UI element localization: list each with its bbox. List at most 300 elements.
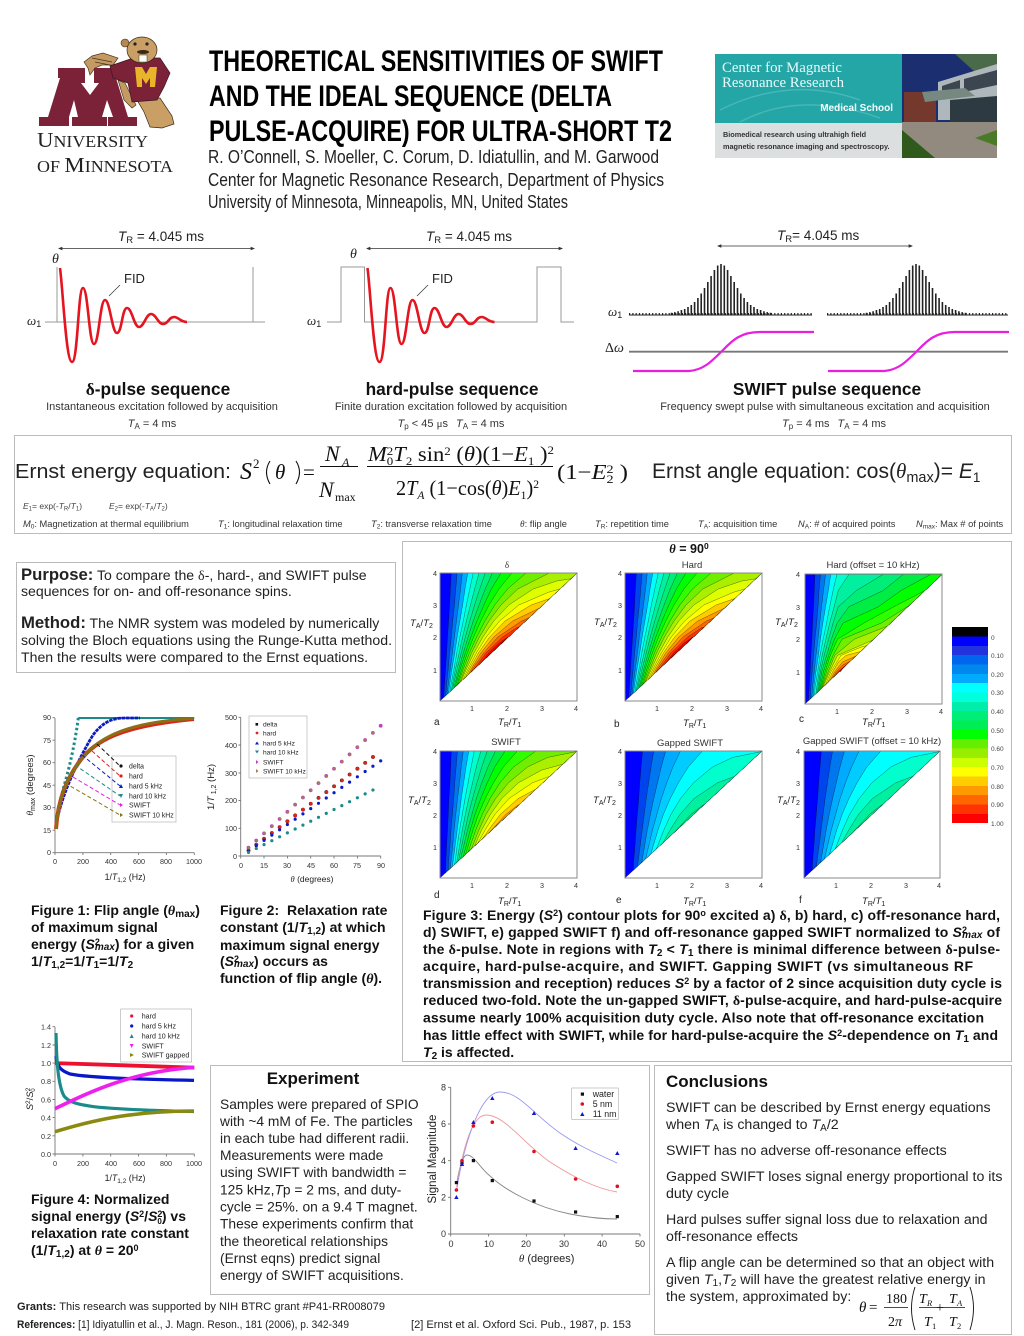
title: AND THE IDEAL SEQUENCE (DELTA <box>209 80 612 113</box>
TR label: R <box>126 235 133 246</box>
caption: figure 1: T <box>85 953 95 969</box>
purpose text <box>21 565 367 599</box>
caption: figure 1: 2 <box>128 960 134 971</box>
chart: figure 4 normalized signal energy: / <box>25 1097 36 1100</box>
tick labels: 0 <box>53 1159 57 1168</box>
energy equation formula: ) <box>534 442 548 466</box>
legend: hard 10 kHz <box>142 1032 180 1040</box>
tick labels: 20 <box>521 1239 531 1249</box>
grants and references: [2] Ernst et al. Oxford Sci. Pub., 1987, p. 153 <box>411 1319 631 1331</box>
caption: figure 1: T <box>119 953 129 969</box>
tick labels: 600 <box>133 857 145 866</box>
symbol definitions: R <box>601 524 606 530</box>
plot a: delta: δ <box>505 560 509 570</box>
chart: figure 1 flip angle <box>25 713 202 884</box>
heading: hard-pulse: hard-pulse sequence <box>366 379 539 399</box>
caption: figure 2: 2 <box>234 954 239 964</box>
plot e: gapped SWIFT: 4 <box>759 881 763 890</box>
chart: figure 4 normalized signal energy <box>25 1009 202 1185</box>
plot b: hard: 3 <box>618 601 622 610</box>
plot b: hard: 4 <box>759 704 763 713</box>
legend: hard 5 kHz <box>129 784 163 790</box>
symbol definitions: : Magnetization at thermal equilibrium <box>34 519 189 529</box>
authors and affiliation: University of Minnesota, Minneapolis, MN, United States <box>208 191 568 212</box>
tick labels: 45 <box>307 861 315 870</box>
method text: Then the results were compared to the Ernst equations. <box>21 649 368 665</box>
purpose text: sequences for on- and off-resonance spins. <box>21 583 292 599</box>
color scale legend: 0.60 <box>991 746 1004 753</box>
plot e: gapped SWIFT: 3 <box>618 779 622 788</box>
heading: Conclusions <box>666 1072 768 1091</box>
sub-captions: A <box>463 422 469 431</box>
tick labels: 6 <box>441 1119 446 1129</box>
symbol definitions: T <box>371 519 378 529</box>
symbol definitions: T <box>595 519 602 529</box>
caption: figure 1: ) <box>195 902 200 918</box>
plot e: gapped SWIFT: T <box>683 896 690 907</box>
body text: (Ernst eqns) predict signal <box>220 1251 380 1266</box>
flip angle formula: R <box>926 1298 933 1308</box>
legend: hard <box>263 730 277 738</box>
energy equation formula: θ)(1−E <box>464 442 527 466</box>
grants and references: Grants: This research was supported by NIH BTRC grant #P41-RR008079 <box>17 1301 385 1313</box>
plot e: gapped SWIFT: 2 <box>612 800 616 807</box>
tick labels: 0.2 <box>41 1132 51 1141</box>
omega1 label: 1 <box>316 319 321 329</box>
sub-captions: p <box>789 422 794 431</box>
body text <box>219 1097 419 1283</box>
tick labels: 30 <box>43 803 51 812</box>
plot a: delta: 2 <box>505 704 509 713</box>
method text: Method: The NMR system was modeled by numerically <box>21 613 380 632</box>
tick labels <box>41 1022 202 1168</box>
pulse baseline <box>327 267 574 322</box>
energy equation formula: 1 <box>528 454 534 468</box>
TR label: = 4.045 ms <box>133 229 204 244</box>
exponential definitions: T <box>71 501 77 511</box>
caption: figure 3: 1 <box>688 948 694 959</box>
body text: A flip angle can be determined so that an object with <box>666 1255 994 1271</box>
sequence captions <box>46 379 990 431</box>
plot d: SWIFT: SWIFT <box>491 737 521 748</box>
axis titles: (Hz) <box>126 1173 145 1183</box>
symbol definitions: N <box>798 519 805 529</box>
caption: figure 4: ) at <box>70 1242 95 1258</box>
caption: figure 2: function of flip angle (θ). <box>220 970 382 987</box>
caption: figure 3: o <box>700 908 706 918</box>
legend: water <box>592 1089 614 1099</box>
plot c: hard offset: A <box>781 622 786 629</box>
panel: delta-pulse diagram <box>27 229 265 362</box>
omega1 label: ω <box>608 304 617 319</box>
axis titles: 1/T <box>105 872 117 882</box>
caption: figure 3: excited a) <box>706 907 779 923</box>
legend: hard 10 kHz <box>263 750 299 756</box>
flip angle formula: 180 <box>886 1292 907 1307</box>
symbol definitions: : Max # of points <box>935 519 1004 529</box>
caption: figure 4: S <box>148 1208 158 1224</box>
caption: figure 2: max <box>234 959 254 970</box>
body text: SWIFT can be described by Ernst energy equations <box>666 1100 991 1116</box>
tick labels: 0 <box>448 1239 454 1249</box>
caption: figure 1 <box>31 902 200 971</box>
plot e: gapped SWIFT: e <box>616 895 622 906</box>
symbol definitions: : # of acquired points <box>809 519 896 529</box>
legend: 5 nm <box>593 1099 612 1109</box>
banner text <box>722 60 893 151</box>
banner text: Medical School <box>820 103 893 114</box>
energy equation formula: ) <box>526 476 533 500</box>
tick labels: 300 <box>225 769 237 778</box>
body text: given T <box>666 1272 713 1288</box>
plot e: gapped SWIFT: T <box>593 795 600 806</box>
energy equation formula: N <box>318 477 335 502</box>
tick labels <box>43 713 202 866</box>
energy equation formula: 2 <box>406 454 412 468</box>
plot a: delta: A <box>416 623 421 630</box>
flip angle formula: + <box>936 1301 944 1316</box>
plot b: hard: T <box>697 718 704 729</box>
heading: SWIFT: SWIFT pulse sequence <box>733 379 921 399</box>
plot f: gapped SWIFT offset: 3 <box>904 881 908 890</box>
plot c: hard offset: T <box>775 617 782 628</box>
plot c: hard offset: 4 <box>939 707 943 716</box>
plot d: SWIFT: T <box>421 795 428 806</box>
plot a: delta: T <box>498 717 505 728</box>
tick labels: 0.0 <box>41 1150 51 1159</box>
TR label: = 4.045 ms <box>441 229 512 244</box>
energy equation formula: A <box>341 455 350 469</box>
energy equation formula: 2 <box>548 443 554 457</box>
energy equation formula: sin <box>412 442 445 466</box>
energy equation formula: M <box>367 442 388 466</box>
energy equation formula: 0 <box>387 454 393 468</box>
caption: figure 2: (S <box>220 953 234 969</box>
tick labels <box>441 1082 645 1249</box>
caption: figure 4: θ = 20 <box>95 1242 134 1259</box>
plot f: gapped SWIFT offset: 3 <box>796 779 800 788</box>
color scale legend: 0 <box>991 635 995 642</box>
exponential definitions: T <box>145 501 151 511</box>
caption: figure 2: ) occurs as <box>254 953 328 969</box>
symbol definitions: A <box>704 524 709 530</box>
plot a: delta: 4 <box>574 704 578 713</box>
data series <box>248 726 381 852</box>
tick labels: 600 <box>133 1159 145 1168</box>
caption: figure 3: T <box>423 1044 433 1060</box>
logo: University of Minnesota <box>37 37 174 177</box>
exponential definitions: / <box>154 501 157 511</box>
symbol definitions: N <box>916 519 923 529</box>
tick labels: 200 <box>77 1159 89 1168</box>
plot a: delta: 1 <box>470 704 474 713</box>
caption: figure 1: 1/T <box>31 953 51 969</box>
plot a: delta <box>410 560 578 729</box>
legend: SWIFT <box>129 802 151 810</box>
plot a: delta: 3 <box>540 704 544 713</box>
plot e: gapped SWIFT: T <box>697 896 704 907</box>
plot f: gapped SWIFT offset: 4 <box>937 881 941 890</box>
symbol definitions: : acquisition time <box>708 519 777 529</box>
caption: figure 3 <box>423 907 1002 1062</box>
axis titles: 1/T <box>105 1173 117 1183</box>
sub-captions: T <box>782 418 790 430</box>
tick labels: 0.6 <box>41 1096 51 1104</box>
body text: SWIFT has no adverse off-resonance effects <box>666 1143 947 1159</box>
tick labels: 1.2 <box>41 1041 51 1050</box>
flip angle formula: A <box>956 1298 963 1308</box>
caption: figure 1: =1/ <box>65 953 85 969</box>
tick labels: 0.4 <box>41 1114 51 1122</box>
exponential definitions: T <box>59 501 65 511</box>
body text: Samples were prepared of SPIO <box>220 1097 419 1112</box>
caption: figure 3: T <box>955 1027 965 1043</box>
caption: figure 1: 2 <box>95 937 100 947</box>
symbol definitions: M <box>23 519 31 529</box>
legend: SWIFT 10 kHz <box>129 812 174 820</box>
body text: the theoretical relationships <box>220 1234 388 1249</box>
arrow: TR span <box>718 245 912 247</box>
symbol definitions: 0 <box>31 524 35 530</box>
color scale legend: 0.10 <box>991 653 1004 660</box>
plot d: SWIFT: / <box>509 896 512 907</box>
caption: figure 3: is affected. <box>437 1044 514 1060</box>
legend <box>112 756 176 822</box>
heading: delta-pulse: δ-pulse sequence <box>86 379 231 399</box>
caption: figure 2: maximum signal energy <box>220 937 380 953</box>
plot d: SWIFT: 2 <box>433 811 437 820</box>
TR label: T <box>118 229 128 244</box>
symbol definitions: max <box>923 524 936 530</box>
tick labels: 10 <box>484 1239 494 1249</box>
grants and references: References: [1] Idiyatullin et al., J. Magn. Reson., 181 (2006), p. 342-349 <box>17 1319 349 1331</box>
plot f: gapped SWIFT offset: / <box>873 896 876 907</box>
energy equation formula: 2 <box>533 477 539 491</box>
body text: is changed to <box>719 1117 811 1133</box>
caption: figure 3: 2 <box>657 948 663 959</box>
exponential definitions: 2 <box>162 506 166 512</box>
sub-captions: T <box>128 418 136 430</box>
banner text: Biomedical research using ultrahigh field <box>723 130 866 139</box>
exponential definitions: 1 <box>29 506 33 512</box>
exponential definitions: E <box>23 501 29 511</box>
sub-captions: Finite duration excitation followed by acquisition <box>335 401 567 413</box>
caption: figure 2: 1,2 <box>307 926 321 937</box>
plot e: gapped SWIFT: 3 <box>725 881 729 890</box>
body text <box>665 1100 1002 1305</box>
symbol definitions: A <box>805 524 810 530</box>
caption: figure 3: the δ-pulse. Note in regions with T <box>423 941 657 958</box>
plot d: SWIFT: 2 <box>505 881 509 890</box>
plot e: gapped SWIFT: 1 <box>655 881 659 890</box>
plot e: gapped SWIFT: / <box>694 896 697 907</box>
caption: figure 3: acquire, hard-pulse-acquire, and SWIFT. Gapping SWIFT (vs simultaneous RF <box>423 958 973 974</box>
exponential definitions <box>23 501 168 512</box>
plot c: hard offset: 3 <box>905 707 909 716</box>
sub-captions: = 4 ms <box>793 418 830 430</box>
pulse baseline <box>45 267 265 322</box>
plot f: gapped SWIFT offset: T <box>790 795 797 806</box>
body text: /2 <box>827 1117 839 1133</box>
tick labels: 75 <box>353 861 361 870</box>
flip angle formula: θ <box>859 1300 867 1316</box>
energy equation formula: T <box>393 442 407 466</box>
caption: figure 4: signal energy (S <box>31 1208 139 1224</box>
caption: figure 3: < <box>663 941 679 957</box>
panel: figure 3 contour plots <box>402 541 1012 1062</box>
flip angle formula: T <box>949 1315 958 1330</box>
caption: figure 4: (1/T <box>31 1242 56 1258</box>
axis titles: θ (degrees) <box>291 874 334 884</box>
symbol definitions: θ: flip angle <box>520 519 567 530</box>
body text: These experiments confirm that <box>220 1216 413 1232</box>
body text: , <box>718 1272 722 1288</box>
caption: figure 3: by a factor of 2 since acquisition duty cycle is <box>689 975 1002 991</box>
color scale legend: 0.70 <box>991 765 1004 772</box>
caption: figure 2 <box>220 902 388 987</box>
energy equation formula: A <box>416 488 425 502</box>
arrow: TR span <box>59 247 254 250</box>
tick labels: 1000 <box>186 857 202 866</box>
caption: figure 2: ) at which <box>321 919 386 935</box>
symbol definitions: T <box>698 519 705 529</box>
energy equation formula: N <box>324 441 341 466</box>
plot a: delta: 1 <box>517 722 521 729</box>
plot b: hard: 2 <box>690 704 694 713</box>
plot c: hard offset: T <box>876 717 883 728</box>
tick labels: 1.4 <box>41 1022 51 1032</box>
panel: experiment <box>210 1066 650 1294</box>
sub-captions: T <box>838 418 846 430</box>
energy equation formula: ( <box>451 442 464 466</box>
plot d: SWIFT: 3 <box>433 779 437 788</box>
plot d: SWIFT: R <box>504 901 509 908</box>
data markers <box>454 1096 620 1218</box>
tick labels: 60 <box>43 758 51 767</box>
caption: figure 3: 2 <box>684 976 689 986</box>
TR label: R <box>785 234 792 245</box>
panel: Ernst equations <box>14 436 1012 534</box>
tick labels: 0 <box>233 852 237 861</box>
tick labels: 40 <box>597 1239 607 1249</box>
sub-captions: = 4 ms <box>850 418 887 430</box>
frequency sweep <box>629 332 1009 371</box>
plot b: hard: 1 <box>655 704 659 713</box>
tick labels: 30 <box>559 1239 569 1249</box>
color scale legend: 0.30 <box>991 690 1004 697</box>
plot a: delta: 2 <box>433 633 437 642</box>
caption: figure 3: and <box>969 1027 998 1043</box>
legend: SWIFT <box>142 1042 164 1050</box>
caption: figure 2: constant (1/T <box>220 919 307 935</box>
exponential definitions: 2 <box>115 506 119 512</box>
tick labels: 75 <box>43 736 51 745</box>
tick labels: 45 <box>43 781 51 790</box>
tick labels: 0 <box>441 1229 446 1239</box>
caption: figure 3: Figure 3: Energy (S <box>423 907 553 923</box>
panel: purpose and method <box>16 562 396 672</box>
sub-captions: = 4 ms <box>140 418 177 430</box>
building photo <box>902 54 997 158</box>
energy equation formula: 2T <box>396 476 418 500</box>
flip angle formula: 2 <box>957 1321 961 1331</box>
legend: hard <box>142 1012 156 1020</box>
tick labels: 200 <box>225 796 237 805</box>
plot f: gapped SWIFT offset: 1 <box>796 843 800 852</box>
flip angle formula: T <box>949 1292 958 1307</box>
symbol definitions: : repetition time <box>605 519 669 529</box>
caption: figure 4: Figure 4: Normalized <box>31 1191 169 1207</box>
legend: hard <box>129 774 143 780</box>
TR label: T <box>426 229 436 244</box>
caption: figure 1: 1 <box>94 960 100 971</box>
plot b: hard: 2 <box>618 633 622 642</box>
fit curves <box>457 1092 617 1219</box>
body text: energy of SWIFT acquisitions. <box>220 1268 404 1283</box>
chart: figure 4 normalized signal energy: S <box>25 1103 36 1110</box>
chart: figure 2 relaxation constant: 1/T <box>206 796 217 810</box>
plot c: hard offset: / <box>785 617 788 628</box>
exponential definitions: 1 <box>76 506 80 512</box>
plot f: gapped SWIFT offset: 2 <box>796 811 800 820</box>
method text <box>21 613 392 665</box>
chart: figure 1 flip angle: (degrees) <box>25 754 36 798</box>
omega1 label: ω <box>27 313 36 328</box>
tick labels: 800 <box>160 1159 172 1168</box>
plot e: gapped SWIFT: A <box>599 800 604 807</box>
caption: figure 3: δ-pulse- <box>946 941 1000 958</box>
plot d: SWIFT: 1 <box>470 881 474 890</box>
plot e: gapped SWIFT: / <box>603 795 606 806</box>
caption: figure 3: of <box>983 924 1000 940</box>
caption: figure 4: ) vs <box>162 1208 186 1224</box>
plot a: delta: / <box>509 717 512 728</box>
delta omega label: Δω <box>605 341 624 356</box>
tick labels: 800 <box>160 857 172 866</box>
body text: Gapped SWIFT loses signal energy proportional to its <box>666 1169 1002 1185</box>
plot c: hard offset: Hard (offset = 10 kHz) <box>826 560 920 571</box>
symbol definitions: T <box>218 519 225 529</box>
arrow: TR span <box>367 247 562 250</box>
axes <box>448 1087 640 1236</box>
banner text: magnetic resonance imaging and spectroscopy. <box>723 142 890 151</box>
plot e: gapped SWIFT: Gapped SWIFT <box>657 738 723 749</box>
legend leader lines <box>65 744 120 815</box>
banner text: Center for Magnetic <box>722 60 842 76</box>
logo: Center for Magnetic Resonance Research banner <box>715 54 997 158</box>
color scale legend: 0.90 <box>991 802 1004 809</box>
theta label: θ <box>52 252 59 267</box>
symbol definitions <box>23 519 1004 530</box>
tick labels: 8 <box>441 1082 446 1092</box>
omega1 label: 1 <box>617 310 622 320</box>
plot f: gapped SWIFT offset: A <box>783 800 788 807</box>
plot f: gapped SWIFT offset: 1 <box>834 881 838 890</box>
tick labels: 2 <box>441 1192 446 1202</box>
body text: T <box>811 1117 821 1133</box>
plot b: hard: 3 <box>725 704 729 713</box>
plot b: hard: 1 <box>702 723 706 730</box>
color scale legend: 0.20 <box>991 672 1004 679</box>
plot b: hard: T <box>607 617 614 628</box>
sub-captions <box>46 401 990 431</box>
TR label: = 4.045 ms <box>792 228 860 243</box>
caption: figure 3: assume nearly 100% acquisition duty cycle. Also note that off-resonance excitation <box>423 1010 984 1026</box>
plot e: gapped SWIFT <box>593 738 763 908</box>
caption: figure 3: max <box>962 930 983 941</box>
angle equation: )= <box>934 460 959 483</box>
FID curve <box>368 268 494 362</box>
